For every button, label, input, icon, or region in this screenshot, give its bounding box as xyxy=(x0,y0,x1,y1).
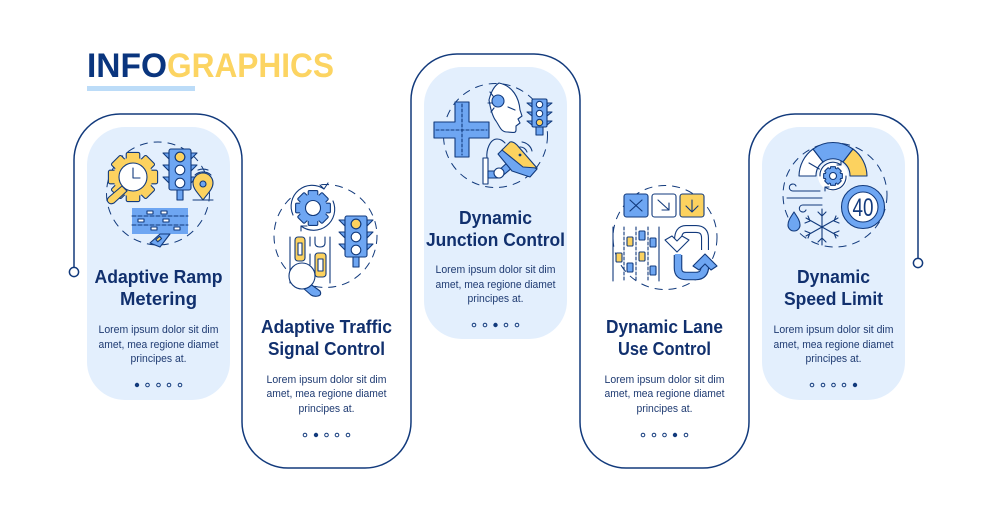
heading: Speed Limit xyxy=(784,288,883,309)
text block: principes at. xyxy=(468,293,524,305)
heading: Junction Control xyxy=(426,229,565,250)
title: GRAPHICS xyxy=(167,47,334,85)
heading: Signal Control xyxy=(268,338,385,359)
text block: principes at. xyxy=(130,353,186,365)
pagination dots xyxy=(641,433,688,437)
text block xyxy=(604,374,724,415)
icon: ramp metering xyxy=(106,142,213,247)
heading: Dynamic xyxy=(459,207,532,228)
panel outline: continuous connector xyxy=(69,54,923,468)
icon: junction control xyxy=(434,83,552,188)
heading: Dynamic xyxy=(797,266,870,287)
text block: Lorem ipsum dolor sit dim xyxy=(266,374,386,386)
heading: Use Control xyxy=(618,338,711,359)
text block: Lorem ipsum dolor sit dim xyxy=(604,374,724,386)
heading xyxy=(261,316,392,359)
icon: speed limit xyxy=(783,142,887,247)
panel: Adaptive Traffic Signal Control xyxy=(261,183,392,437)
text block xyxy=(98,324,218,365)
title xyxy=(87,47,334,85)
panel: Dynamic Lane Use Control xyxy=(604,186,724,437)
text block: Lorem ipsum dolor sit dim xyxy=(436,264,556,276)
pagination dots xyxy=(303,433,350,437)
icon: traffic signal control xyxy=(274,183,377,296)
text block: amet, mea regione diamet xyxy=(604,388,724,400)
pagination dots xyxy=(472,323,519,327)
pagination dots xyxy=(810,383,857,387)
text block xyxy=(436,264,556,305)
panel: Adaptive Ramp Metering xyxy=(87,127,230,400)
heading xyxy=(606,316,723,359)
text block: amet, mea regione diamet xyxy=(774,339,894,351)
title: INFO xyxy=(87,47,167,85)
heading: Adaptive Traffic xyxy=(261,316,392,337)
text block: amet, mea regione diamet xyxy=(266,388,386,400)
heading xyxy=(784,266,883,309)
heading: Adaptive Ramp xyxy=(94,266,222,287)
panel: Dynamic Speed Limit xyxy=(762,127,905,400)
text block: Lorem ipsum dolor sit dim xyxy=(774,324,894,336)
heading: Dynamic Lane xyxy=(606,316,723,337)
pagination dots xyxy=(135,383,182,387)
text block xyxy=(774,324,894,365)
text block: principes at. xyxy=(806,353,862,365)
text block: Lorem ipsum dolor sit dim xyxy=(98,324,218,336)
text block xyxy=(266,374,386,415)
text block: amet, mea regione diamet xyxy=(436,279,556,291)
heading: Metering xyxy=(120,288,197,309)
title underline xyxy=(87,86,195,91)
panel: Dynamic Junction Control xyxy=(424,67,567,339)
heading xyxy=(426,207,565,250)
speed number: 40 xyxy=(852,194,874,222)
text block: principes at. xyxy=(636,403,692,415)
icon: lane use control xyxy=(613,186,717,290)
text block: amet, mea regione diamet xyxy=(98,339,218,351)
heading xyxy=(94,266,222,309)
text block: principes at. xyxy=(298,403,354,415)
